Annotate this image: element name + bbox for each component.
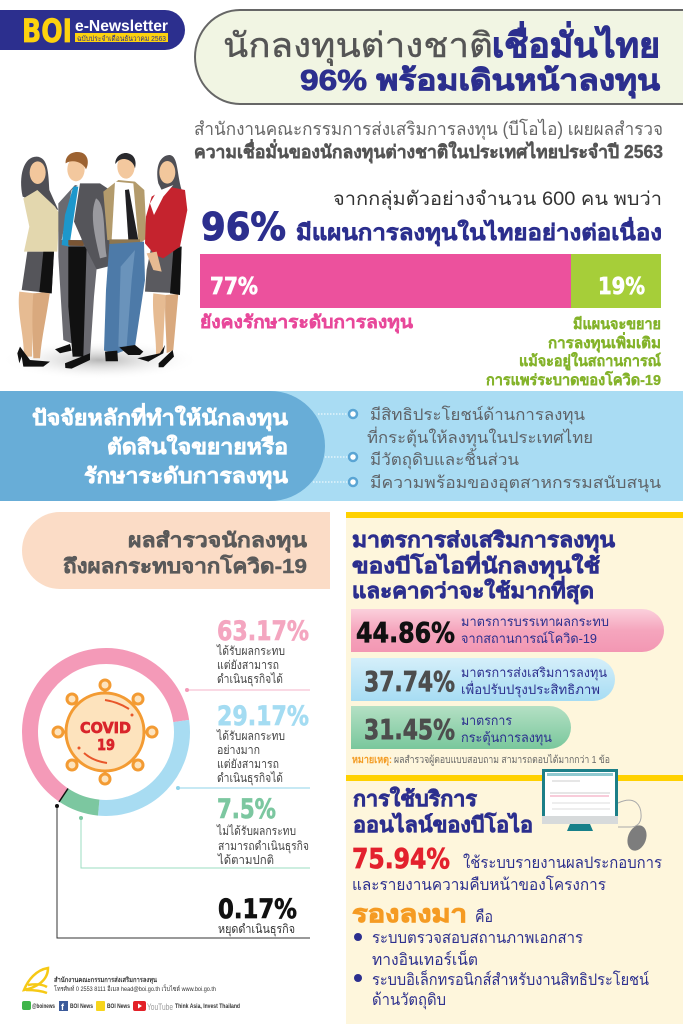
secondary heading: รองลงมา [352,901,467,928]
header badge: BOI e-Newsletter [0,10,185,50]
label: plan to expand: แม้จะอยู่ในสถานการณ์ [519,352,661,371]
footnote [352,754,610,766]
icon: computer monitor and mouse [542,769,650,853]
online services heading: ออนไลน์ของบีโอไอ [353,812,533,837]
intro text [194,118,663,164]
title line 1: เชื่อมั่นไทย [492,21,660,65]
headline 96%: 96% [201,205,286,249]
factors heading [32,402,289,490]
secondary heading [352,901,493,928]
footer: contact text: โทรศัพท์ 0 2553 8111 อีเมล head@boi.go.th เว็บไซต์ www.boi.go.th [54,984,216,993]
stat 7.5% [216,794,309,867]
header badge: BOI e-Newsletter: ฉบับประจำเดือนธันวาคม 2563 [77,34,166,43]
label: maintain investment: ยังคงรักษาระดับการลงทุน [200,312,414,334]
online services list: ระบบอิเล็กทรอนิกส์สำหรับงานสิทธิประโยชน์ [372,969,649,989]
stat 0.17%: หยุดดำเนินธุรกิจ [218,922,295,937]
sample size statement: จากกลุ่มตัวอย่างจำนวน 600 คน พบว่า [333,189,662,211]
stat 63.17% [216,616,309,687]
stat 7.5%: ไม่ได้รับผลกระทบ [216,824,296,838]
footnote: หมายเหตุ: [352,755,392,766]
icon: covid virus: 19 [97,736,115,754]
footer: social media row [22,1001,240,1012]
measure bar 44.86%: 44.86% [356,616,455,649]
measures heading: มาตรการส่งเสริมการลงทุน [352,529,616,554]
footer: social media row: BOI News [107,1003,130,1010]
factors heading: ตัดสินใจขยายหรือ [107,434,288,459]
online services heading [353,786,533,837]
measure bar 37.74%: มาตรการส่งเสริมการลงทุน [461,665,607,681]
online services list: ด้านวัตถุดิบ [372,991,446,1010]
online services list: ทางอินเทอร์เน็ต [372,949,478,969]
headline 96% [201,205,662,249]
measure bar 31.45%: กระตุ้นการลงทุน [461,730,552,746]
measure bar 37.74% [351,658,615,701]
stat 63.17%: แต่ยังสามารถ [217,658,279,672]
title line 2: 96% พร้อมเดินหน้าลงทุน [300,65,660,98]
measures heading [352,529,616,605]
intro text: ความเชื่อมั่นของนักลงทุนต่างชาติในประเทศไทยประจำปี 2563 [194,139,663,164]
factors list: ที่กระตุ้นให้ลงทุนในประเทศไทย [367,426,593,448]
factors list: มีความพร้อมของอุตสาหกรรมสนับสนุน [370,474,661,493]
stat 63.17%: 63.17% [217,616,309,647]
icon: covid virus: COVID [80,719,131,737]
measure bar 44.86%: มาตรการบรรเทาผลกระทบ [461,614,609,629]
online services heading: การใช้บริการ [353,786,478,811]
factors list [367,405,661,493]
icon: covid virus [52,680,158,784]
label: plan to expand: มีแผนจะขยาย [573,316,661,333]
footer: contact text [54,976,216,993]
online services list [354,930,649,1010]
stat 29.17%: ดำเนินธุรกิจได้ [217,771,283,786]
measures heading: ของบีโอไอที่นักลงทุนใช้ [352,550,600,580]
illustration: four business people [0,152,200,380]
footer: social media row: YouTube [147,1002,173,1012]
panel: covid survey heading: ผลสำรวจนักลงทุน [128,530,307,553]
stat 0.17%: 0.17% [218,894,297,925]
footer: social media row: Think Asia, Invest Thailand [175,1003,240,1010]
footer: social media row: BOI News [70,1003,93,1010]
stat 75.94%: และรายงานความคืบหน้าของโครงการ [352,875,606,894]
panel: BOI measures and online services [346,512,683,1024]
stat 75.94%: ใช้ระบบรายงานผลประกอบการ [463,853,662,872]
stacked bar 77% / 19%: 19% [598,274,645,300]
title panel [195,10,683,104]
label: plan to expand: การแพร่ระบาดของโควิด-19 [486,370,661,389]
stat 0.17% [218,894,297,937]
header badge: BOI e-Newsletter: e-Newsletter [75,18,168,35]
panel: covid survey heading: ถึงผลกระทบจากโควิด-19 [63,554,307,578]
leader lines [55,688,310,938]
stat 29.17%: อย่างมาก [217,743,260,757]
stat 7.5%: 7.5% [217,794,276,825]
measure bar 37.74%: เพื่อปรับปรุงประสิทธิภาพ [461,681,600,698]
measures heading: และคาดว่าจะใช้มากที่สุด [352,575,594,605]
stat 7.5%: ได้ตามปกติ [217,853,274,867]
intro text: สำนักงานคณะกรรมการส่งเสริมการลงทุน (บีโอไอ) เผยผลสำรวจ [194,118,663,140]
factors list: มีวัตถุดิบและชิ้นส่วน [370,448,519,470]
measure bar 31.45% [351,706,571,749]
factors heading: ปัจจัยหลักที่ทำให้นักลงทุน [32,402,289,432]
stat 29.17%: 29.17% [217,701,309,732]
stat 29.17%: ได้รับผลกระทบ [216,729,285,743]
headline 96%: มีแผนการลงทุนในไทยอย่างต่อเนื่อง [296,216,662,247]
stacked bar 77% / 19%: 77% [210,274,258,300]
measure bar 31.45%: มาตรการ [461,713,512,728]
stat 29.17%: แต่ยังสามารถ [217,757,279,771]
footer: BOI logo [24,968,48,993]
secondary heading: คือ [475,908,493,926]
stat 63.17%: ได้รับผลกระทบ [216,644,285,658]
footer: social media row: @boinews [32,1003,55,1010]
stat 29.17% [216,701,309,786]
stat 7.5%: สามารถดำเนินธุรกิจ [218,839,309,854]
footnote: ผลสำรวจผู้ตอบแบบสอบถาม สามารถตอบได้มากกว่า 1 ข้อ [394,754,610,766]
online services list: ระบบตรวจสอบสถานภาพเอกสาร [372,930,583,947]
measure bar 44.86% [351,609,664,652]
panel: covid survey heading [22,512,330,589]
label: plan to expand [486,316,661,389]
header badge: BOI e-Newsletter: BOI [22,12,72,50]
footer: social media row: f [61,1002,65,1012]
measure bar 31.45%: 31.45% [364,713,455,746]
label: plan to expand: การลงทุนเพิ่มเติม [548,332,661,353]
measure bar 44.86%: จากสถานการณ์โควิด-19 [461,631,597,646]
factors heading: รักษาระดับการลงทุน [84,465,289,490]
stacked bar 77% / 19% [200,254,661,308]
donut chart [30,656,182,808]
measure bar 37.74%: 37.74% [364,665,455,698]
footer: contact text: สำนักงานคณะกรรมการส่งเสริมการลงทุน [54,976,157,984]
title line 1 [223,21,660,66]
stat 75.94% [352,842,662,894]
panel: key factors [0,391,683,501]
factors list: มีสิทธิประโยชน์ด้านการลงทุน [370,405,585,425]
stat 75.94%: 75.94% [352,842,450,875]
stat 63.17%: ดำเนินธุรกิจได้ [217,672,283,687]
factors bullets [349,410,357,486]
title line 1: นักลงทุนต่างชาติ [223,27,493,66]
